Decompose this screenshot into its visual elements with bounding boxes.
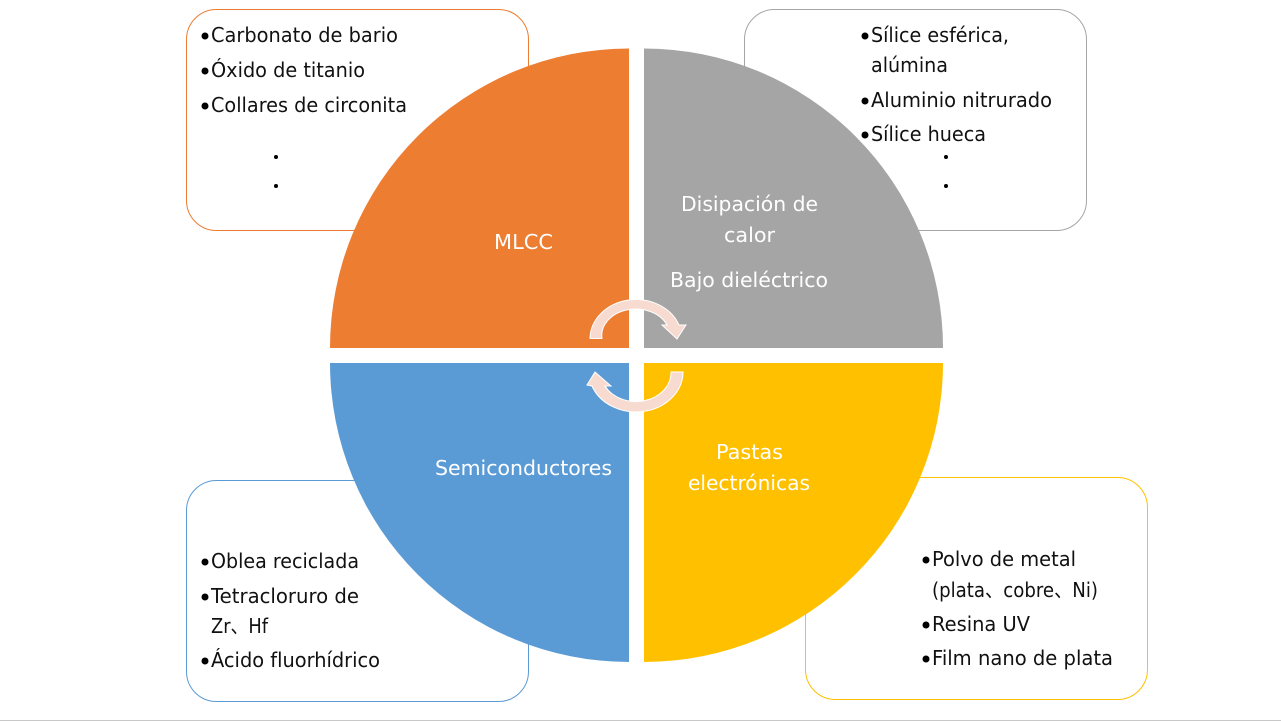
text: electronic paste materials list [922, 547, 1113, 670]
arrow: top clockwise [590, 300, 686, 339]
text: heat dissipation materials list: Sílice esférica, [871, 23, 1009, 47]
chart: orange quadrant MLCC [330, 48, 629, 348]
label: semiconductors: Semiconductores [435, 456, 612, 480]
panel: semiconductor materials [186, 480, 528, 702]
panel: electronic paste materials [806, 478, 1148, 700]
label: heat dissipation and low dielectric: Disipación de [681, 192, 818, 216]
text: electronic paste materials list: Film nano de plata [932, 646, 1113, 670]
text: MLCC materials list: Óxido de titanio [211, 57, 365, 82]
text: heat dissipation materials list [862, 23, 1052, 188]
text: MLCC materials list: Carbonato de bario [211, 23, 398, 47]
text: heat dissipation materials list: Sílice hueca [871, 122, 986, 146]
text: semiconductor materials list: Zr、Hf [211, 614, 269, 638]
text: semiconductor materials list: Oblea reciclada [211, 549, 359, 573]
label: heat dissipation and low dielectric: calor [724, 223, 776, 247]
text: semiconductor materials list [202, 549, 380, 672]
chart: yellow quadrant electronic pastes [644, 363, 943, 662]
label: electronic pastes [688, 440, 810, 495]
text: MLCC materials list [202, 23, 407, 188]
label: heat dissipation and low dielectric [670, 192, 828, 292]
text: semiconductor materials list: Tetracloruro de [210, 584, 359, 608]
arrow: bottom clockwise [587, 372, 683, 412]
label: heat dissipation and low dielectric: Bajo dieléctrico [670, 268, 828, 292]
text: heat dissipation materials list: Aluminio nitrurado [871, 88, 1052, 112]
label: electronic pastes: Pastas [716, 440, 783, 464]
label: electronic pastes: electrónicas [688, 471, 810, 495]
chart: grey quadrant heat dissipation [644, 48, 943, 348]
text: electronic paste materials list: Polvo de metal [932, 547, 1076, 571]
text: semiconductor materials list: Ácido fluorhídrico [211, 647, 380, 672]
panel: heat dissipation materials [744, 10, 1086, 230]
panel: MLCC materials [186, 10, 528, 230]
label: MLCC: MLCC [494, 230, 553, 254]
text: electronic paste materials list: (plata、cobre、Ni) [932, 578, 1098, 602]
text: electronic paste materials list: Resina UV [932, 612, 1030, 636]
text: heat dissipation materials list: alúmina [871, 53, 948, 77]
text: MLCC materials list: Collares de circonita [211, 93, 407, 117]
chart: blue quadrant semiconductors [330, 363, 629, 662]
